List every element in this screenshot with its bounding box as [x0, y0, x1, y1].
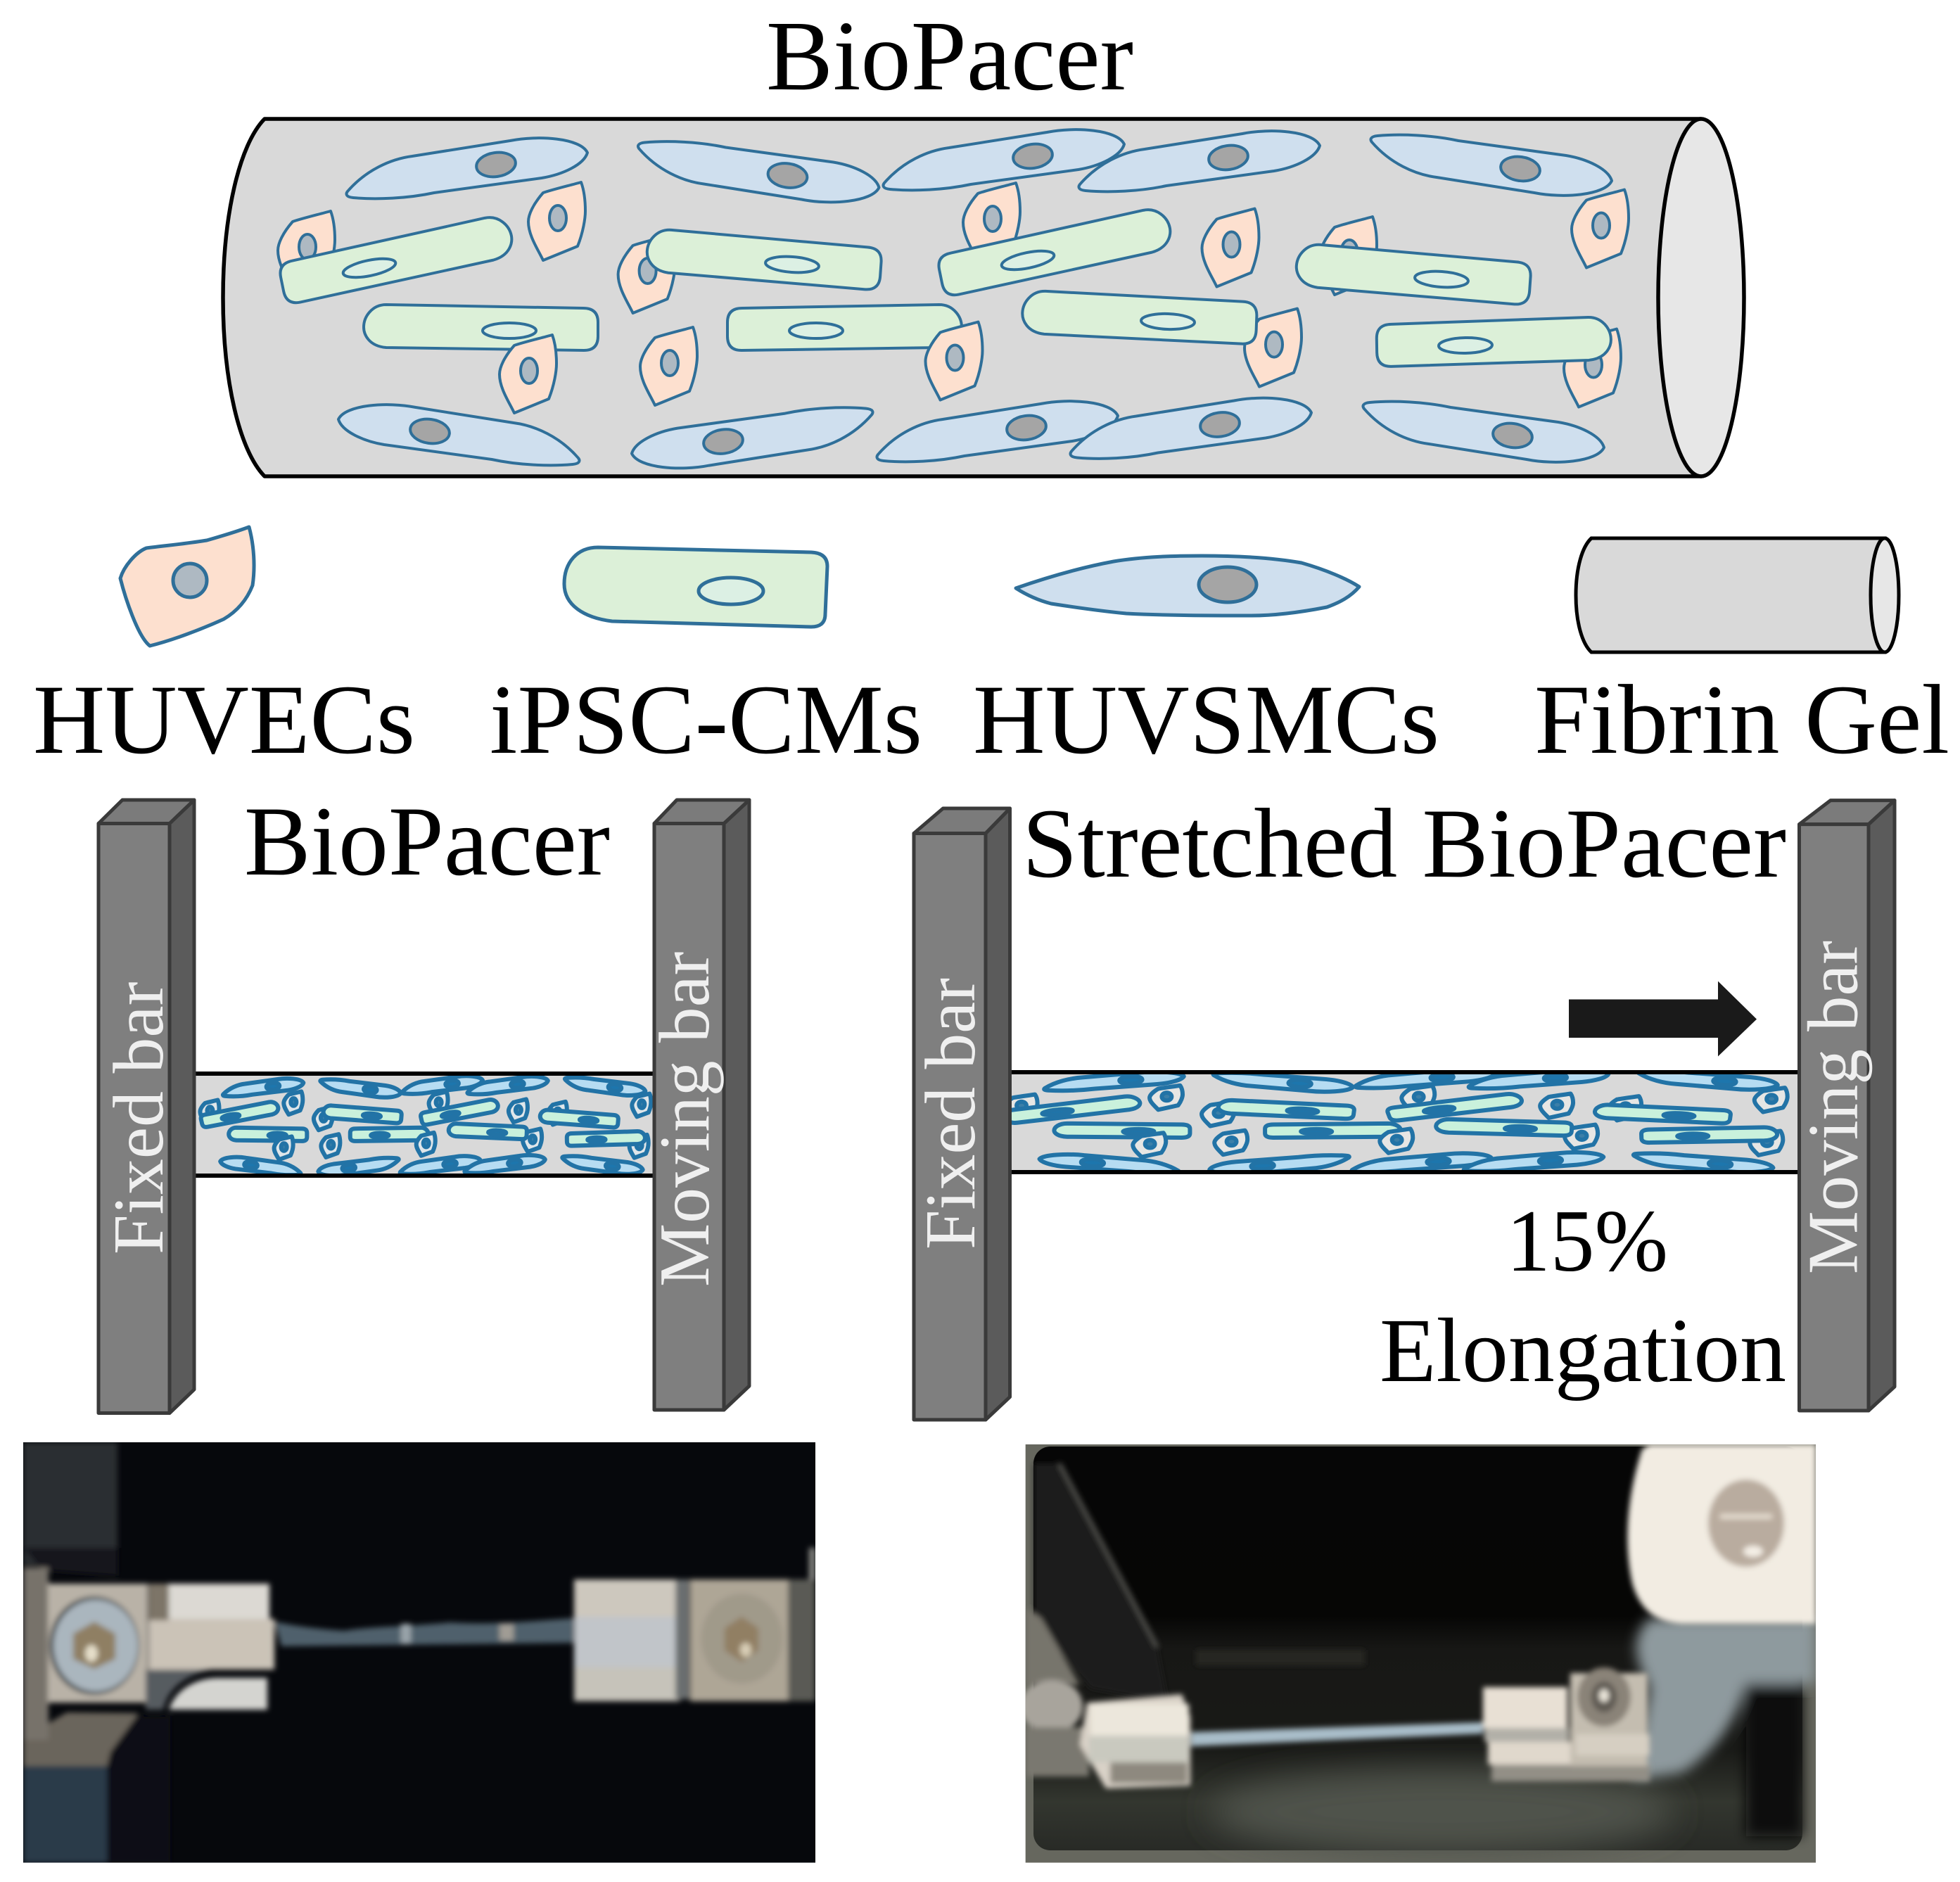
- heading: Stretched BioPacer: Stretched BioPacer: [1022, 789, 1786, 898]
- moving bar: Moving bar: [645, 951, 725, 1287]
- fixed bar: [911, 808, 1010, 1420]
- fixed bar: [98, 800, 194, 1413]
- tissue strip: [194, 1074, 654, 1176]
- cylinder open end: [1658, 119, 1744, 476]
- panel: BioPacer cylinder with cells: [223, 119, 1744, 476]
- cells inside the cylinder: [277, 129, 1629, 468]
- heading: BioPacer: BioPacer: [244, 787, 610, 896]
- legend icon: HUVSMC cell: [1016, 556, 1359, 616]
- legend label: iPSC-CMs: iPSC-CMs: [490, 665, 922, 775]
- title: BioPacer: BioPacer: [766, 0, 1133, 111]
- moving bar: [645, 800, 749, 1410]
- label: 15%: 15%: [1506, 1193, 1668, 1290]
- legend label: Fibrin Gel: Fibrin Gel: [1534, 665, 1949, 775]
- fixed bar: Fixed bar: [911, 978, 991, 1250]
- fixed bar: Fixed bar: [99, 981, 179, 1254]
- stretched tissue strip: [1004, 1069, 1800, 1174]
- legend icon: iPSC-CM cell: [564, 547, 827, 627]
- legend icon: fibrin gel cylinder: [1576, 538, 1899, 652]
- photo: BioPacer mounted between clamps: [23, 1442, 815, 1863]
- panel: stretched BioPacer diagram: [911, 789, 1895, 1420]
- legend label: HUVECs: HUVECs: [33, 665, 415, 775]
- cylinder body: [223, 119, 1701, 476]
- arrow: stretching direction: [1569, 981, 1757, 1057]
- panel: unstretched BioPacer diagram: [98, 787, 749, 1413]
- legend icon: HUVEC cell: [120, 527, 254, 646]
- moving bar: [1794, 801, 1895, 1411]
- legend label: HUVSMCs: HUVSMCs: [973, 665, 1439, 775]
- label: Elongation: Elongation: [1380, 1300, 1786, 1401]
- moving bar: Moving bar: [1794, 941, 1873, 1274]
- photo: stretched BioPacer between clamps: [1021, 1444, 1816, 1863]
